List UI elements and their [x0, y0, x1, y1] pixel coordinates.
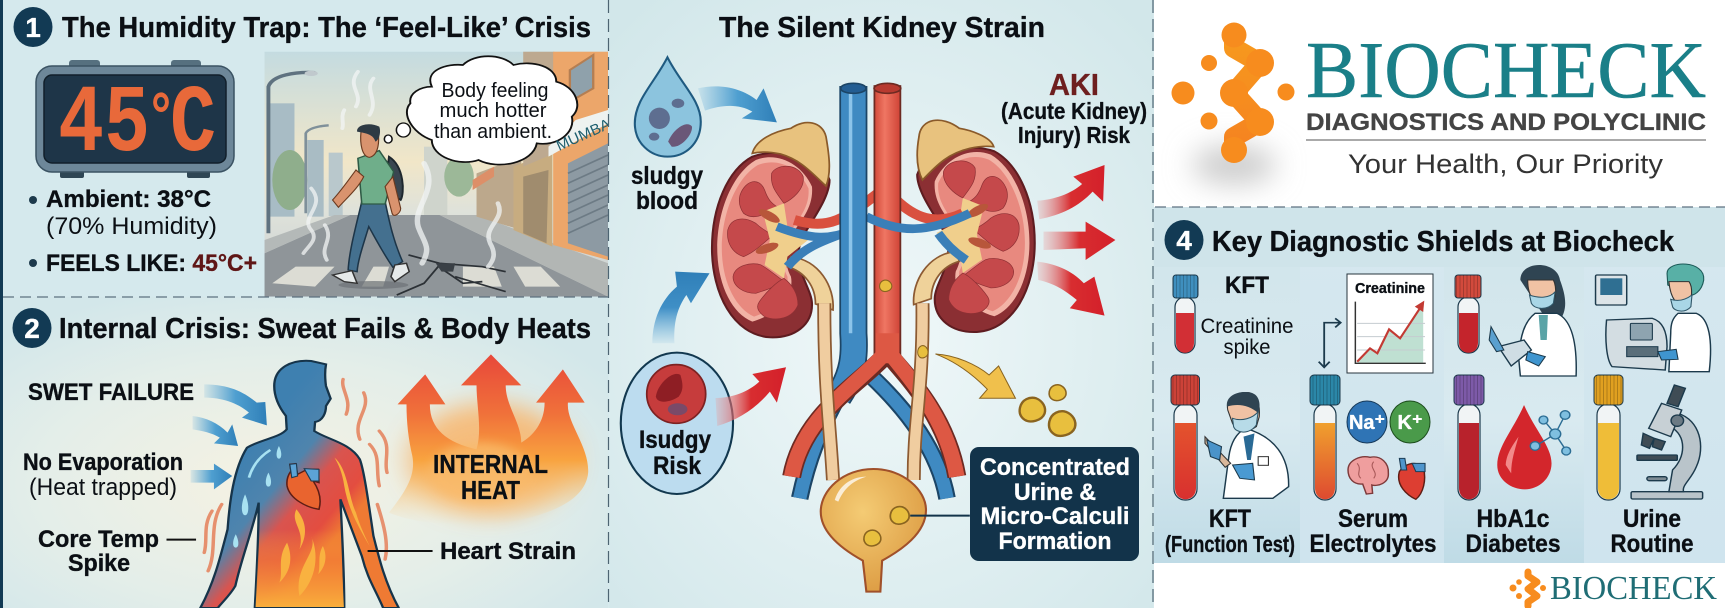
- right kidney: [914, 147, 1035, 332]
- sweat failure arrows: [191, 384, 267, 489]
- callout: concentrated urine: Urine &: [1014, 479, 1096, 506]
- label: urine routine: Routine: [1610, 530, 1694, 558]
- arrow: yellow to stones: [935, 354, 1015, 398]
- heading: internal crisis: Internal Crisis: Sweat Fails & Body Heats: [59, 313, 591, 345]
- internal flames: [279, 458, 370, 596]
- text: KFT creatinine spike: KFT: [1225, 272, 1269, 299]
- label: serum electrolytes: Electrolytes: [1310, 530, 1436, 558]
- label: sludgy risk: Risk: [653, 452, 701, 480]
- callout lines: [166, 540, 433, 551]
- number badge 4: [1164, 220, 1204, 260]
- label: serum electrolytes: Serum: [1338, 505, 1408, 533]
- label: urine routine: Urine: [1623, 505, 1681, 533]
- label: KFT function test: KFT: [1209, 505, 1251, 533]
- thought text: Body feeling: [442, 79, 548, 102]
- label: sludgy blood: [631, 162, 703, 215]
- chart: creatinine trend: Creatinine: [1355, 280, 1425, 297]
- number badge 1: 1: [25, 12, 41, 43]
- callout: concentrated urine: [970, 447, 1139, 561]
- heading: diagnostic shields: Key Diagnostic Shields at Biocheck: [1212, 226, 1675, 258]
- icon: sludgy blood drop: [635, 57, 701, 157]
- small wordmark: BIOCHECK: [1550, 570, 1717, 607]
- internal heat cloud and arrows: [389, 354, 588, 524]
- arrow: drop to kidney: [698, 86, 777, 122]
- arrow: risk to kidney: [652, 272, 710, 343]
- label: sludgy risk: [639, 426, 711, 480]
- ureters: [824, 303, 923, 480]
- panel: biocheck logo: [1154, 0, 1725, 207]
- left kidney: [712, 153, 833, 337]
- heading: kidney strain: The Silent Kidney Strain: [719, 12, 1045, 44]
- bullet: ambient temperature: [29, 186, 217, 240]
- heat wisps: [204, 379, 387, 571]
- icon: heart organ: [1399, 458, 1425, 499]
- callout: concentrated urine: Micro-Calculi: [980, 503, 1130, 530]
- label: AKI risk: [1001, 67, 1147, 148]
- label: sludgy risk: Isudgy: [639, 426, 711, 454]
- icon: microscope: [1631, 385, 1703, 499]
- logo mark: [1172, 22, 1294, 185]
- icon: potassium ion: [1390, 401, 1430, 443]
- text: KFT creatinine spike: spike: [1224, 336, 1270, 359]
- icon: sodium ion: [1347, 401, 1387, 443]
- artery upper: [794, 83, 963, 363]
- AKI arrows: [1037, 165, 1115, 316]
- icon: sodium ion: Na⁺: [1349, 412, 1385, 434]
- panel: humidity trap: [3, 0, 617, 297]
- icon: digital thermometer display: 45: [58, 70, 150, 179]
- label: internal heat: [433, 449, 548, 505]
- lower blue vessels: [800, 377, 947, 498]
- tube: red cap top: [1455, 275, 1481, 353]
- small logo mark: [1510, 572, 1546, 606]
- text: KFT creatinine spike: [1200, 272, 1294, 359]
- street sign: MUMBAI: [554, 114, 617, 155]
- arrow: risk red: [716, 367, 786, 426]
- label: HbA1c diabetes: HbA1c: [1476, 505, 1550, 533]
- label: KFT function test: (Function Test): [1165, 531, 1295, 557]
- label: sludgy blood: sludgy: [631, 162, 703, 190]
- tube: electrolytes: [1310, 375, 1340, 500]
- bullet: ambient temperature: Ambient: 38°C: [46, 186, 211, 213]
- label: HbA1c diabetes: [1466, 505, 1560, 558]
- text: KFT creatinine spike: Creatinine: [1200, 315, 1294, 338]
- callout: concentrated urine: Concentrated: [980, 454, 1130, 481]
- callout: concentrated urine: Formation: [998, 528, 1112, 555]
- artery fork: [792, 333, 957, 477]
- thought text: than ambient.: [434, 120, 552, 143]
- panel: silent kidney strain: [609, 0, 1153, 608]
- label: AKI risk: AKI: [1049, 67, 1099, 102]
- connector to callout: [910, 513, 970, 519]
- number badge 2: 2: [24, 313, 40, 344]
- label: no evaporation: No Evaporation: [23, 449, 183, 476]
- heading: humidity trap: The Humidity Trap: The ‘Feel-Like’ Crisis: [62, 12, 591, 44]
- label: core temp spike: [38, 526, 159, 577]
- icon: digital thermometer display: C: [170, 70, 216, 179]
- icon: heart: [287, 464, 320, 509]
- label: AKI risk: (Acute Kidney): [1001, 98, 1147, 124]
- label: sweat failure: SWET FAILURE: [28, 379, 194, 406]
- label: internal heat: HEAT: [461, 475, 520, 505]
- label: serum electrolytes: [1310, 505, 1436, 558]
- icon: digital thermometer display: [36, 60, 234, 179]
- tube: HbA1c: [1454, 375, 1484, 500]
- arrow: elbow connector: [1319, 318, 1341, 367]
- label: core temp spike: Spike: [68, 550, 130, 577]
- vein: [777, 83, 970, 397]
- thought text: [434, 79, 552, 143]
- illustration: urinary system: [621, 57, 1115, 592]
- illustration: lab technician with clipboard: [1489, 265, 1576, 376]
- panel: key diagnostic shields: [1154, 207, 1725, 563]
- adrenal glands: [752, 120, 994, 186]
- illustration: man walking in hot street: [265, 52, 617, 297]
- label: no evaporation: (Heat trapped): [29, 474, 177, 501]
- number badge 2: [12, 308, 52, 348]
- label: urine routine: [1610, 505, 1694, 558]
- person: [333, 124, 409, 289]
- number badge 1: [14, 7, 52, 47]
- number badge 4: 4: [1176, 225, 1192, 256]
- icon: potassium ion: K⁺: [1398, 412, 1422, 434]
- label: no evaporation: [23, 449, 183, 501]
- oval: sludgy risk: [621, 353, 733, 494]
- label: core temp spike: Core Temp: [38, 526, 159, 553]
- sweat drops: [233, 446, 281, 548]
- tube: blue cap top: [1173, 275, 1198, 353]
- logo wordmark: BIOCHECK: [1306, 27, 1706, 115]
- label: heart strain: Heart Strain: [440, 538, 576, 565]
- tube: KFT red: [1171, 375, 1200, 500]
- icon: glucose blood drop: [1497, 405, 1571, 489]
- bullet: ambient temperature: (70% Humidity): [46, 213, 217, 240]
- bladder: [821, 469, 926, 592]
- illustration: overheating body: [166, 354, 588, 608]
- illustration: analyser machine and technician: [1596, 264, 1711, 372]
- illustration: scientist with pipette: [1205, 392, 1289, 498]
- logo tagline: Your Health, Our Priority: [1348, 149, 1664, 179]
- label: HbA1c diabetes: Diabetes: [1466, 530, 1560, 558]
- panel: internal crisis: [3, 297, 608, 608]
- icon: brain: [1348, 457, 1388, 494]
- label: KFT function test: [1165, 505, 1295, 557]
- icon: digital thermometer display: °: [146, 85, 176, 157]
- thought text: much hotter: [440, 99, 547, 122]
- kidney stones: [864, 280, 1075, 546]
- footer logo: [1154, 563, 1725, 608]
- thought dots: [384, 123, 410, 143]
- label: internal heat: INTERNAL: [433, 449, 548, 479]
- chart: creatinine trend: [1347, 274, 1433, 373]
- tube: urine: [1594, 375, 1623, 500]
- bullet: feels like: FEELS LIKE: 45°C+: [46, 250, 257, 277]
- logo subtitle: DIAGNOSTICS AND POLYCLINIC: [1306, 109, 1706, 136]
- label: sludgy blood: blood: [636, 187, 698, 215]
- body silhouette: [200, 361, 399, 608]
- label: AKI risk: Injury) Risk: [1018, 122, 1130, 148]
